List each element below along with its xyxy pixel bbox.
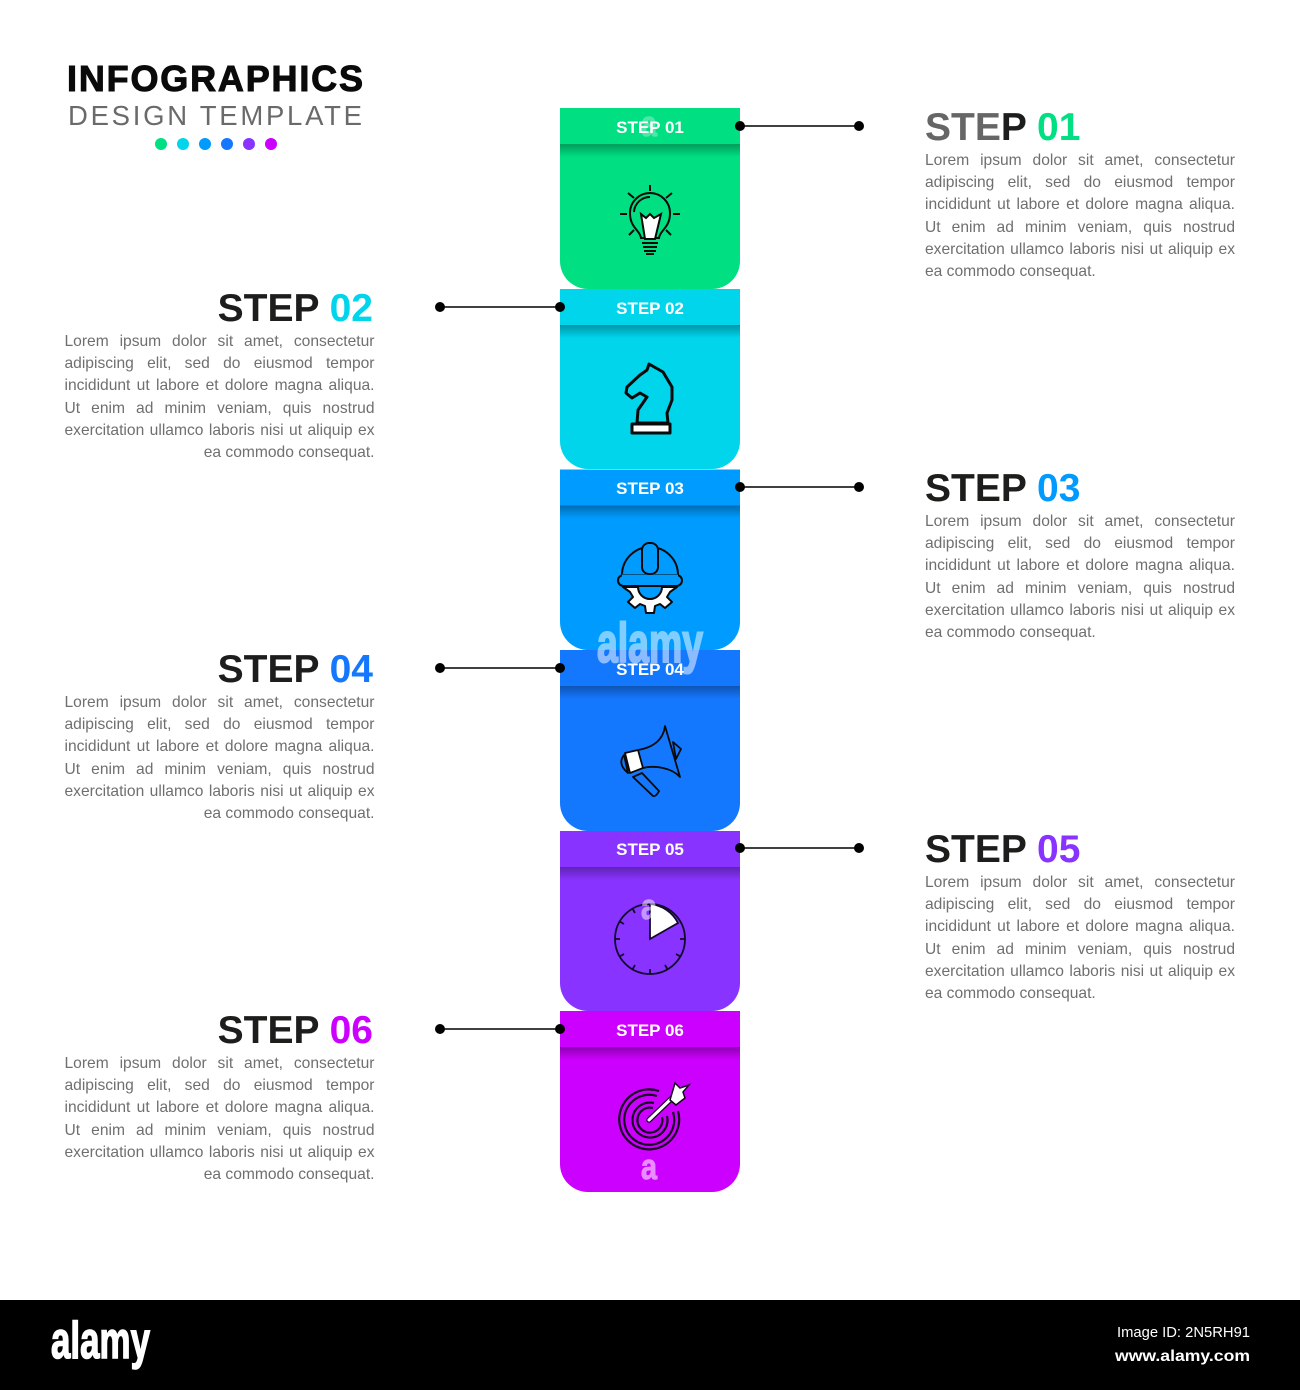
card: step 04 xyxy=(560,650,740,831)
text block: step 02 xyxy=(64,287,374,461)
text: incididunt ut labore et dolore magna aliqua. xyxy=(925,918,1235,935)
text: exercitation ullamco laboris nisi ut aliquip ex xyxy=(925,241,1235,258)
text: adipiscing elit, sed do eiusmod tempor xyxy=(64,1077,374,1094)
text: Lorem ipsum dolor sit amet, consectetur xyxy=(925,874,1235,891)
text: incididunt ut labore et dolore magna aliqua. xyxy=(925,196,1235,213)
footer bar xyxy=(0,1300,1300,1390)
text: incididunt ut labore et dolore magna aliqua. xyxy=(64,1099,374,1116)
text block: step 06 xyxy=(64,1009,374,1183)
text: ea commodo consequat. xyxy=(925,985,1096,1002)
text: exercitation ullamco laboris nisi ut aliquip ex xyxy=(64,783,374,800)
text: Ut enim ad minim veniam, quis nostrud xyxy=(925,580,1235,597)
connector: step 03 xyxy=(735,482,864,492)
text block: step 04 xyxy=(64,648,374,822)
title: INFOGRAPHICS xyxy=(67,58,363,99)
text: Lorem ipsum dolor sit amet, consectetur xyxy=(64,333,374,350)
card: step 03: STEP 03 xyxy=(616,479,684,498)
icon: light bulb xyxy=(620,185,680,254)
icon: timer xyxy=(615,904,685,974)
connector: step 02 xyxy=(435,302,565,312)
card: step 01: STEP 01 xyxy=(616,118,684,137)
text: incididunt ut labore et dolore magna aliqua. xyxy=(925,557,1235,574)
text: STEP 03 xyxy=(925,467,1080,510)
text: exercitation ullamco laboris nisi ut aliquip ex xyxy=(64,422,374,439)
text: incididunt ut labore et dolore magna aliqua. xyxy=(64,377,374,394)
text: exercitation ullamco laboris nisi ut aliquip ex xyxy=(925,963,1235,980)
card: step 05: STEP 05 xyxy=(616,840,684,859)
text: Ut enim ad minim veniam, quis nostrud xyxy=(925,219,1235,236)
text block: step 03 xyxy=(925,467,1235,641)
card: step 06: STEP 06 xyxy=(616,1021,684,1040)
text: ea commodo consequat. xyxy=(925,624,1096,641)
text: Lorem ipsum dolor sit amet, consectetur xyxy=(64,1055,374,1072)
text: Lorem ipsum dolor sit amet, consectetur xyxy=(64,694,374,711)
connector: step 06 xyxy=(435,1024,565,1034)
title colour dots xyxy=(155,138,277,150)
text: STEP 05 xyxy=(925,828,1080,871)
text: incididunt ut labore et dolore magna aliqua. xyxy=(64,738,374,755)
card: step 02 xyxy=(560,289,740,469)
text: ea commodo consequat. xyxy=(204,444,374,461)
watermark: a xyxy=(641,1146,658,1187)
card: step 02: STEP 02 xyxy=(616,299,684,318)
text: STEP 01 xyxy=(925,106,1080,149)
card: step 04: STEP 04 xyxy=(616,660,684,679)
icon: target and arrow xyxy=(619,1083,689,1149)
card: step 06 xyxy=(560,1011,740,1192)
text block: step 05 xyxy=(925,828,1235,1002)
text: exercitation ullamco laboris nisi ut aliquip ex xyxy=(925,602,1235,619)
watermark: alamy xyxy=(597,611,703,674)
text: Ut enim ad minim veniam, quis nostrud xyxy=(64,761,374,778)
icon: megaphone xyxy=(621,726,681,796)
title xyxy=(67,58,363,131)
text: adipiscing elit, sed do eiusmod tempor xyxy=(64,716,374,733)
text: adipiscing elit, sed do eiusmod tempor xyxy=(925,896,1235,913)
text block: step 01 xyxy=(925,106,1235,280)
connector: step 04 xyxy=(435,663,565,673)
card: step 01 xyxy=(560,108,740,289)
website: www.alamy.com xyxy=(1114,1348,1250,1365)
icon: helmet and gear xyxy=(618,543,682,613)
text: Lorem ipsum dolor sit amet, consectetur xyxy=(925,513,1235,530)
text: exercitation ullamco laboris nisi ut aliquip ex xyxy=(64,1144,374,1161)
connector: step 05 xyxy=(735,843,864,853)
watermark: a xyxy=(641,886,658,927)
text: adipiscing elit, sed do eiusmod tempor xyxy=(925,535,1235,552)
icon: chess knight xyxy=(626,364,672,433)
text: STEP 04 xyxy=(218,648,373,691)
text: adipiscing elit, sed do eiusmod tempor xyxy=(925,174,1235,191)
text: adipiscing elit, sed do eiusmod tempor xyxy=(64,355,374,372)
text: STEP 02 xyxy=(218,287,373,330)
text: ea commodo consequat. xyxy=(204,1166,374,1183)
card: step 03 xyxy=(560,470,740,650)
text: STEP 06 xyxy=(218,1009,373,1052)
text: Lorem ipsum dolor sit amet, consectetur xyxy=(925,152,1235,169)
text: Ut enim ad minim veniam, quis nostrud xyxy=(64,1122,374,1139)
watermark: a xyxy=(641,103,658,144)
text: Ut enim ad minim veniam, quis nostrud xyxy=(925,941,1235,958)
footer logo: alamy xyxy=(51,1312,150,1370)
image id: Image ID: 2N5RH91 xyxy=(1117,1324,1250,1341)
card: step 05 xyxy=(560,831,740,1011)
text: ea commodo consequat. xyxy=(204,805,374,822)
title: DESIGN TEMPLATE xyxy=(68,100,362,131)
text: Ut enim ad minim veniam, quis nostrud xyxy=(64,400,374,417)
watermark xyxy=(597,103,703,1187)
text: ea commodo consequat. xyxy=(925,263,1096,280)
connector: step 01 xyxy=(735,121,864,131)
